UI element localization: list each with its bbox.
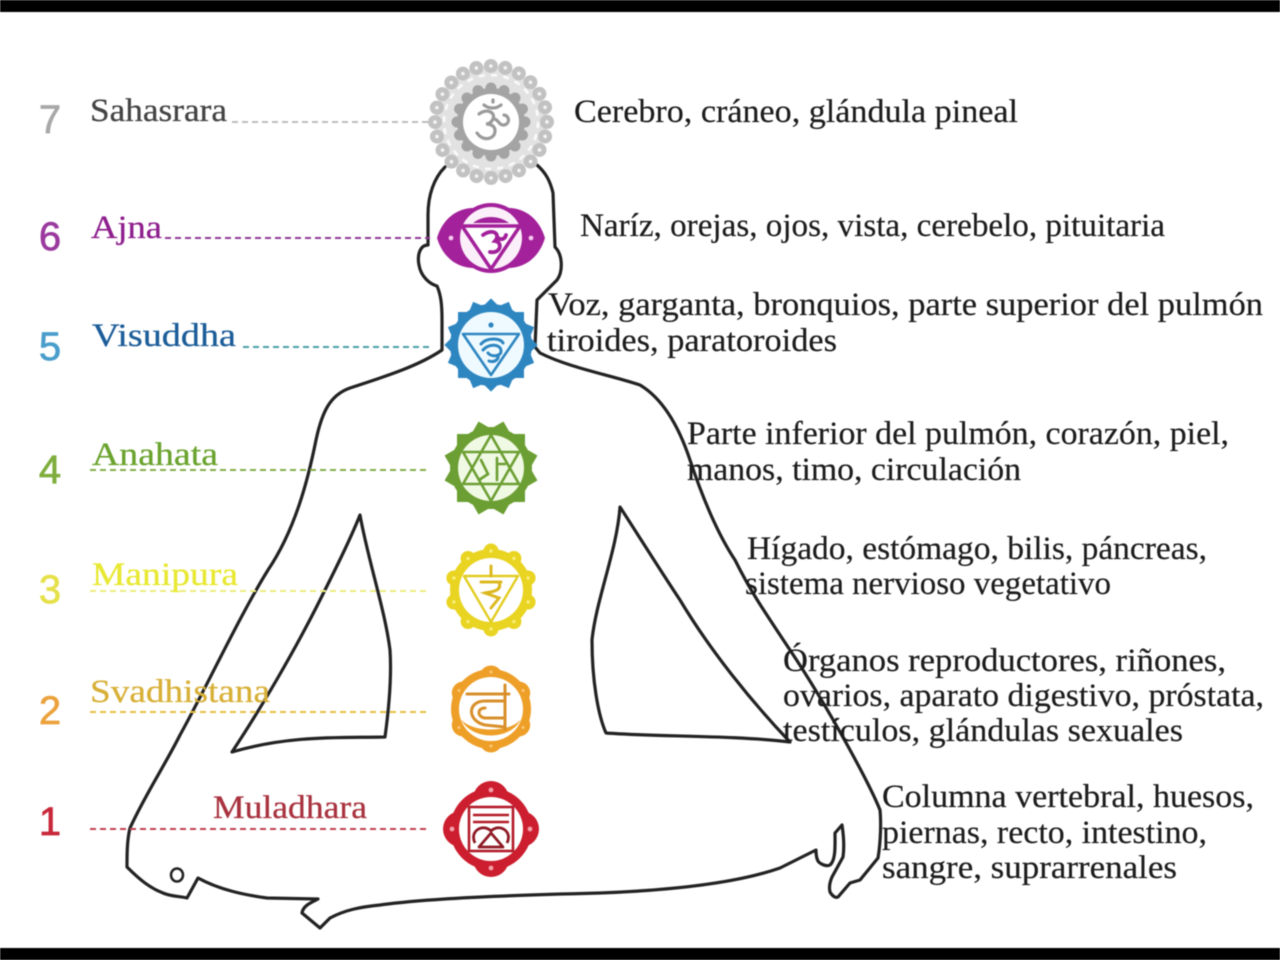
chakra 5 icon: Visuddha [444, 298, 538, 392]
body part descriptions: Parte inferior del pulmón, corazón, piel, [687, 416, 1229, 452]
chakra names: Svadhistana [90, 674, 270, 710]
meditating body outline [127, 165, 881, 928]
chakra 3 icon: Manipura [450, 549, 532, 631]
body part descriptions: piernas, recto, intestino, [882, 815, 1207, 851]
chakra numbers [39, 98, 61, 844]
chakra names: Manipura [92, 557, 238, 593]
chakra numbers: 4 [39, 448, 61, 492]
left arm gap [232, 515, 391, 752]
chakra names: Visuddha [92, 318, 236, 354]
body part descriptions: Voz, garganta, bronquios, parte superior del pulmón [548, 287, 1263, 323]
top black bar [0, 0, 1280, 12]
chakra names: Anahata [92, 437, 218, 473]
chakra numbers: 7 [39, 98, 61, 142]
chakra 7 icon: Sahasrara [435, 66, 547, 178]
body part descriptions: Columna vertebral, huesos, [882, 779, 1254, 815]
chakra names: Muladhara [213, 790, 367, 826]
body part descriptions: Naríz, orejas, ojos, vista, cerebelo, pituitaria [580, 208, 1165, 244]
body part descriptions: Órganos reproductores, riñones, [783, 641, 1226, 679]
chakra numbers: 5 [39, 325, 61, 369]
left knee mark [171, 868, 183, 882]
chakra numbers: 6 [39, 215, 61, 259]
body part descriptions: Hígado, estómago, bilis, páncreas, [747, 531, 1207, 567]
chakra 2 icon: Svadhistana [451, 669, 531, 749]
right arm gap [592, 507, 790, 742]
body part descriptions: Cerebro, cráneo, glándula pineal [574, 94, 1018, 130]
chakra numbers: 1 [39, 800, 61, 844]
chakra numbers: 2 [39, 689, 61, 733]
body part descriptions: sistema nervioso vegetativo [745, 566, 1111, 602]
body part descriptions [547, 94, 1264, 886]
chakra names [90, 93, 367, 826]
chakra 4 icon: Anahata [445, 422, 537, 514]
body part descriptions: sangre, suprarrenales [882, 850, 1177, 886]
chakra 6 icon: Ajna [437, 203, 545, 273]
bottom black bar [0, 948, 1280, 960]
chakra names: Sahasrara [90, 93, 227, 129]
body part descriptions: manos, timo, circulación [687, 452, 1021, 488]
dashed connector lines [90, 122, 430, 829]
chakra 1 icon: Muladhara [450, 788, 532, 870]
chakra names: Ajna [91, 210, 162, 246]
chakra numbers: 3 [39, 568, 61, 612]
body part descriptions: ovarios, aparato digestivo, próstata, [783, 678, 1264, 714]
body part descriptions: tiroides, paratoroides [547, 323, 837, 359]
body part descriptions: testículos, glándulas sexuales [783, 713, 1183, 749]
